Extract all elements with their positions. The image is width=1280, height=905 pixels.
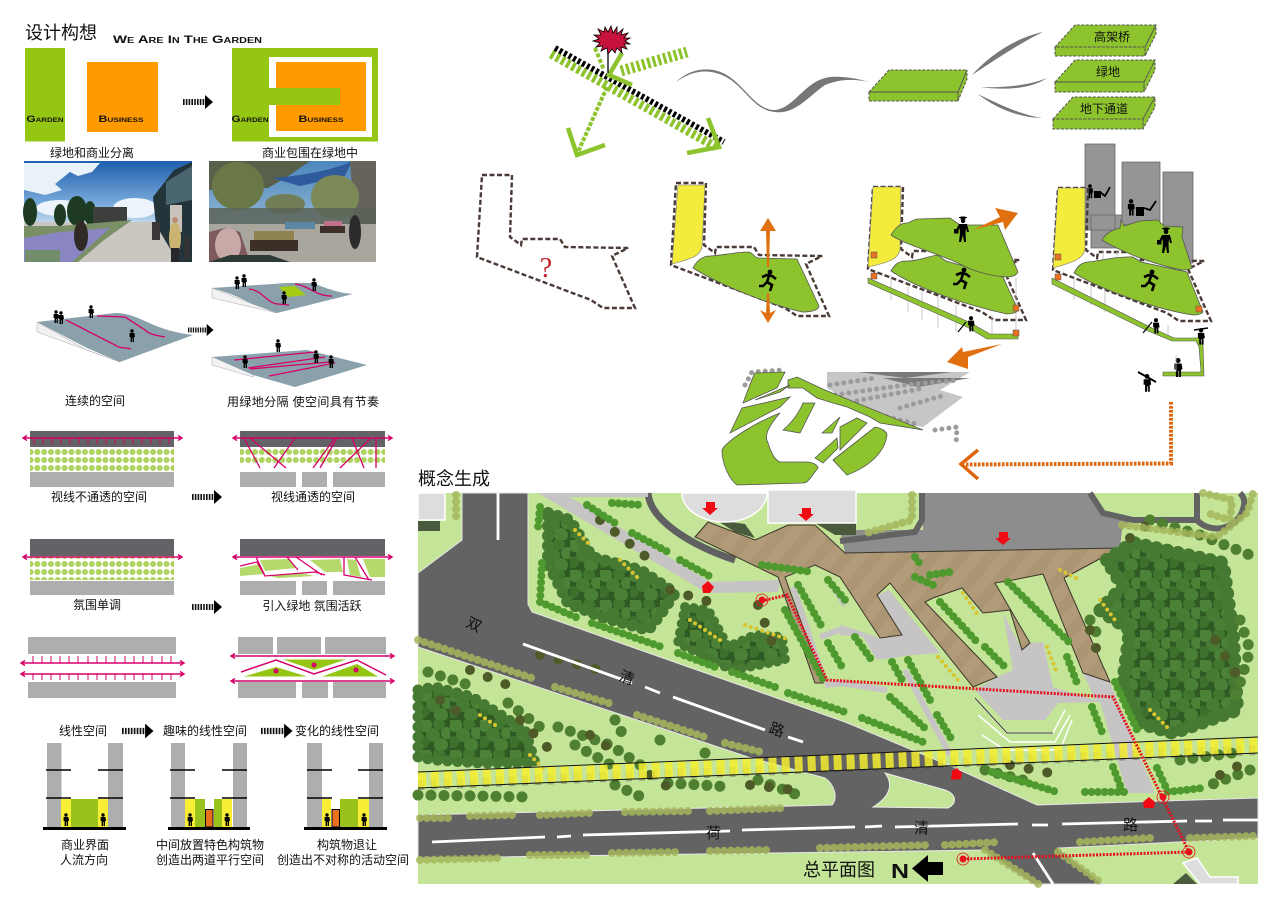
diagram: garden and business separated xyxy=(25,48,158,142)
caption: asymmetric: 创造出不对称的活动空间 xyxy=(277,852,409,867)
section: parallel space xyxy=(168,743,250,830)
diagram: terrain with green divider xyxy=(212,274,353,313)
gray walkways xyxy=(538,493,780,593)
structure xyxy=(206,810,213,827)
caption: linear space: 线性空间 xyxy=(59,724,107,738)
green slab xyxy=(869,70,967,101)
caption: interesting linear space: 趣味的线性空间 xyxy=(163,723,247,738)
arrow xyxy=(122,724,154,738)
subtitle: we are in the garden: We Are In The Garden xyxy=(113,34,262,46)
trees xyxy=(745,370,960,445)
arrow: separation to surround xyxy=(183,95,213,109)
caption: flow direction: 人流方向 xyxy=(60,852,108,867)
caption: surrounded: 商业包围在绿地中 xyxy=(262,145,358,160)
slab: elevated bridge xyxy=(1055,25,1156,56)
garden label: Garden xyxy=(26,114,64,124)
big orange arrow xyxy=(947,344,1002,369)
caption: continuous space: 连续的空间 xyxy=(65,393,125,408)
dancer xyxy=(1198,328,1205,345)
guitarist xyxy=(1144,374,1151,392)
rail band xyxy=(418,737,1258,788)
caption: transparent: 视线通透的空间 xyxy=(271,489,355,504)
arrow: terrain xyxy=(188,324,214,336)
map title: 总平面图 xyxy=(803,860,875,880)
concept: site axes xyxy=(551,26,724,155)
heading: design concept: 设计构想 xyxy=(25,23,97,43)
site plan perspective xyxy=(722,370,970,485)
diagram: business surrounded by garden xyxy=(232,48,378,142)
master plan xyxy=(418,490,1258,885)
site step 2 xyxy=(671,183,829,323)
diagram: opaque sight xyxy=(23,431,182,487)
caption: separated: 绿地和商业分离 xyxy=(50,145,134,160)
plaza gray road xyxy=(840,493,1133,553)
small island xyxy=(873,773,954,808)
north arrow xyxy=(912,855,943,882)
slab: green space xyxy=(1055,60,1155,92)
master plan: 清 xyxy=(617,668,637,689)
sight line xyxy=(23,436,182,440)
business label: Business xyxy=(98,114,144,124)
ground xyxy=(418,493,1258,884)
caption: two parallel: 创造出两道平行空间 xyxy=(156,853,264,867)
garden block xyxy=(25,48,65,142)
caption: opaque: 视线不通透的空间 xyxy=(51,489,147,504)
diagram: terrain with rhythm steps xyxy=(212,339,367,387)
wood deck xyxy=(695,522,1120,687)
tree clusters xyxy=(418,513,1237,763)
red entrance markers xyxy=(702,502,1155,808)
diagram: business surrounded by garden: Garden xyxy=(232,114,268,124)
section: linear space xyxy=(43,743,126,830)
dashed orange arrow xyxy=(961,402,1171,479)
orange arrow out xyxy=(973,208,1018,230)
buildings xyxy=(418,493,445,520)
diagram: zigzag space xyxy=(231,637,394,698)
diagram: business surrounded by garden: Business xyxy=(298,114,344,124)
section: asymmetric space xyxy=(304,743,387,830)
scattered trees xyxy=(418,515,1250,800)
diagram: monotone atmosphere xyxy=(23,539,182,595)
caption: monotone: 氛围单调 xyxy=(73,598,121,612)
site step 3 xyxy=(868,187,1026,339)
caption: central structure: 中间放置特色构筑物 xyxy=(156,837,264,852)
arrow xyxy=(261,724,292,738)
caption: business interface: 商业界面 xyxy=(61,837,109,852)
slab: green space: 绿地 xyxy=(1096,64,1120,79)
caption: lively: 引入绿地 氛围活跃 xyxy=(262,598,362,613)
musician xyxy=(1174,358,1182,377)
heading: concept generation: 概念生成 xyxy=(418,468,490,489)
bright hedges xyxy=(538,503,1203,793)
road markings xyxy=(432,493,1258,884)
posts xyxy=(891,275,1016,338)
master plan: 荷 xyxy=(706,825,721,842)
orange double arrow xyxy=(760,218,776,323)
slab: elevated bridge: 高架桥 xyxy=(1094,29,1130,44)
office towers xyxy=(1085,144,1193,263)
road labels: 双 xyxy=(463,614,484,636)
north label: N xyxy=(891,861,909,883)
diagram: continuous terrain xyxy=(37,305,193,362)
roads xyxy=(418,493,1258,884)
diagram: linear arrows xyxy=(21,637,184,698)
slab: underground passage: 地下通道 xyxy=(1080,102,1128,116)
site step 4 xyxy=(1052,144,1211,392)
master plan: 路 xyxy=(1123,817,1138,834)
swooshes: branches xyxy=(972,32,1047,118)
pink paths xyxy=(66,316,165,349)
business block xyxy=(87,62,158,132)
route targets xyxy=(756,594,1195,865)
photo: plaza with trees xyxy=(209,161,376,262)
caption: divide with green: 用绿地分隔 使空间具有节奏 xyxy=(227,394,379,409)
photo: street with flower bed xyxy=(23,161,192,262)
site step 1 xyxy=(477,175,635,308)
master plan: 清 xyxy=(914,820,929,837)
red burst xyxy=(607,43,609,73)
swoosh: link to green slab xyxy=(676,69,869,112)
question mark: ? xyxy=(540,253,552,284)
diagram: transparent sight xyxy=(233,431,392,487)
red route xyxy=(762,595,1189,859)
caption: setback: 构筑物退让 xyxy=(317,837,377,852)
master plan: 路 xyxy=(767,720,787,741)
arrow: atmosphere xyxy=(192,600,222,614)
curved garden lines xyxy=(975,698,1072,750)
pale road hedges xyxy=(418,493,1255,885)
slab: underground passage xyxy=(1053,97,1155,129)
arrow: sight xyxy=(192,490,222,504)
caption: varied linear space: 变化的线性空间 xyxy=(295,723,379,738)
diagram: lively atmosphere xyxy=(233,539,392,595)
